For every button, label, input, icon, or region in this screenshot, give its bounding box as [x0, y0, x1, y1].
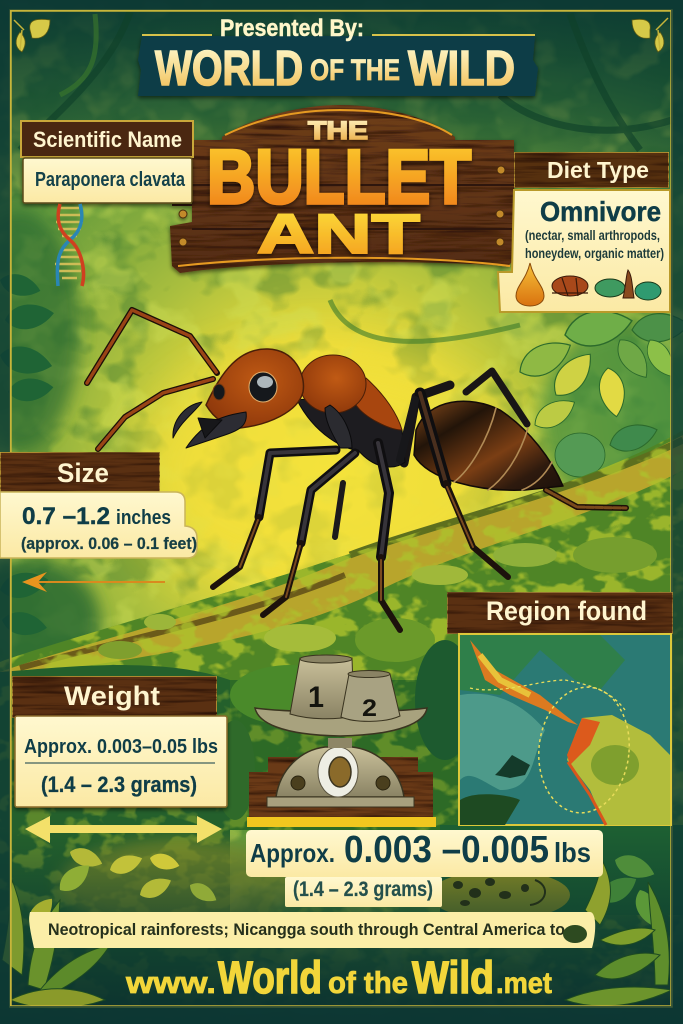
header [21, 121, 193, 157]
banner: world of the wild: WILD [408, 42, 515, 96]
branch with moss [0, 435, 683, 680]
footer: website: of the [328, 965, 408, 1000]
weight 1 [290, 655, 354, 719]
title text: BULLET [207, 135, 471, 220]
body [498, 190, 670, 312]
body [23, 158, 192, 203]
header: Weight [64, 681, 160, 711]
foliage: lower left leaves [24, 844, 662, 930]
header [0, 452, 160, 492]
value strip: lbs [554, 837, 591, 868]
panel: region found [447, 592, 673, 825]
panel: approx weight [246, 829, 603, 907]
lower jungle [0, 620, 683, 1024]
panel: scientific name [21, 121, 193, 203]
tray [255, 708, 427, 736]
header: Diet Type [547, 157, 649, 183]
near legs [213, 393, 508, 630]
icon: dna helix [55, 204, 84, 286]
moss clumps [98, 537, 657, 662]
value strip: Approx. [250, 838, 335, 868]
strip: habitat text: Neotropical rainforests; Nicangga south through Central America to [48, 920, 565, 939]
antennae [87, 310, 217, 449]
footer: website: Wild [412, 952, 494, 1003]
header [12, 676, 217, 718]
header [447, 592, 673, 634]
weight 2 [341, 670, 400, 722]
map [459, 634, 671, 825]
body: Approx. 0.003–0.05 lbs [24, 736, 218, 758]
base [267, 738, 414, 807]
foliage: right leaves [513, 304, 683, 477]
header: Scientific Name [33, 127, 182, 152]
icon: beetle [552, 276, 588, 296]
header: Size [57, 458, 109, 488]
panel: weight [12, 676, 227, 807]
weight 1: 1 [308, 681, 324, 714]
foliage: left dark leaves [0, 270, 56, 639]
body: (approx. 0.06 – 0.1 feet) [21, 534, 197, 553]
icon: corner leaf right [632, 18, 668, 52]
panel: diet type [498, 152, 670, 312]
body [0, 492, 197, 558]
abdomen [414, 401, 563, 490]
title text: ANT [257, 202, 420, 265]
grams: (1.4 – 2.3 grams) [293, 878, 433, 901]
illustration: bullet ant [87, 310, 626, 630]
value strip: 0.003 –0.005 [344, 829, 549, 871]
panel: size [0, 452, 197, 558]
banner: world of the wild: OF THE [310, 54, 400, 87]
footer: website: World [218, 952, 322, 1003]
footer: website [125, 952, 552, 1003]
grams [285, 877, 442, 907]
strip: habitat text [29, 912, 595, 948]
title text: THE [308, 117, 368, 145]
thorax and waist [297, 355, 405, 467]
title text [207, 117, 471, 265]
body: (1.4 – 2.3 grams) [41, 772, 197, 797]
banner: world of the wild [138, 36, 538, 96]
far legs [335, 371, 527, 537]
tail leg [546, 490, 626, 508]
body [15, 716, 227, 807]
head [206, 349, 303, 428]
body: Paraponera clavata [35, 169, 186, 191]
body: Omnivore [540, 196, 661, 227]
footer: website: www. [125, 965, 216, 1000]
icon: insects [595, 270, 661, 300]
arrow: weight range [25, 816, 222, 843]
header [514, 152, 669, 188]
body: 0.7 –1.2 [22, 503, 110, 530]
icon: corner leaf left [14, 19, 50, 52]
jaguar spots [453, 878, 545, 906]
illustration: weighing scale [247, 655, 436, 827]
wooden stand [247, 757, 436, 827]
icon: nectar drop [516, 263, 544, 306]
weight 2: 2 [362, 695, 377, 722]
foliage: bottom plants [2, 860, 672, 1008]
title sign [170, 105, 514, 273]
body: inches [116, 507, 171, 529]
wooden board [170, 105, 514, 273]
mandibles [173, 402, 246, 448]
footer: website: .met [496, 967, 552, 1000]
banner: world of the wild: WORLD [155, 42, 303, 96]
heading: presented by: Presented By: [220, 15, 364, 42]
value strip [246, 829, 603, 877]
arrow: size scale [22, 572, 165, 592]
header: Region found [486, 596, 647, 626]
